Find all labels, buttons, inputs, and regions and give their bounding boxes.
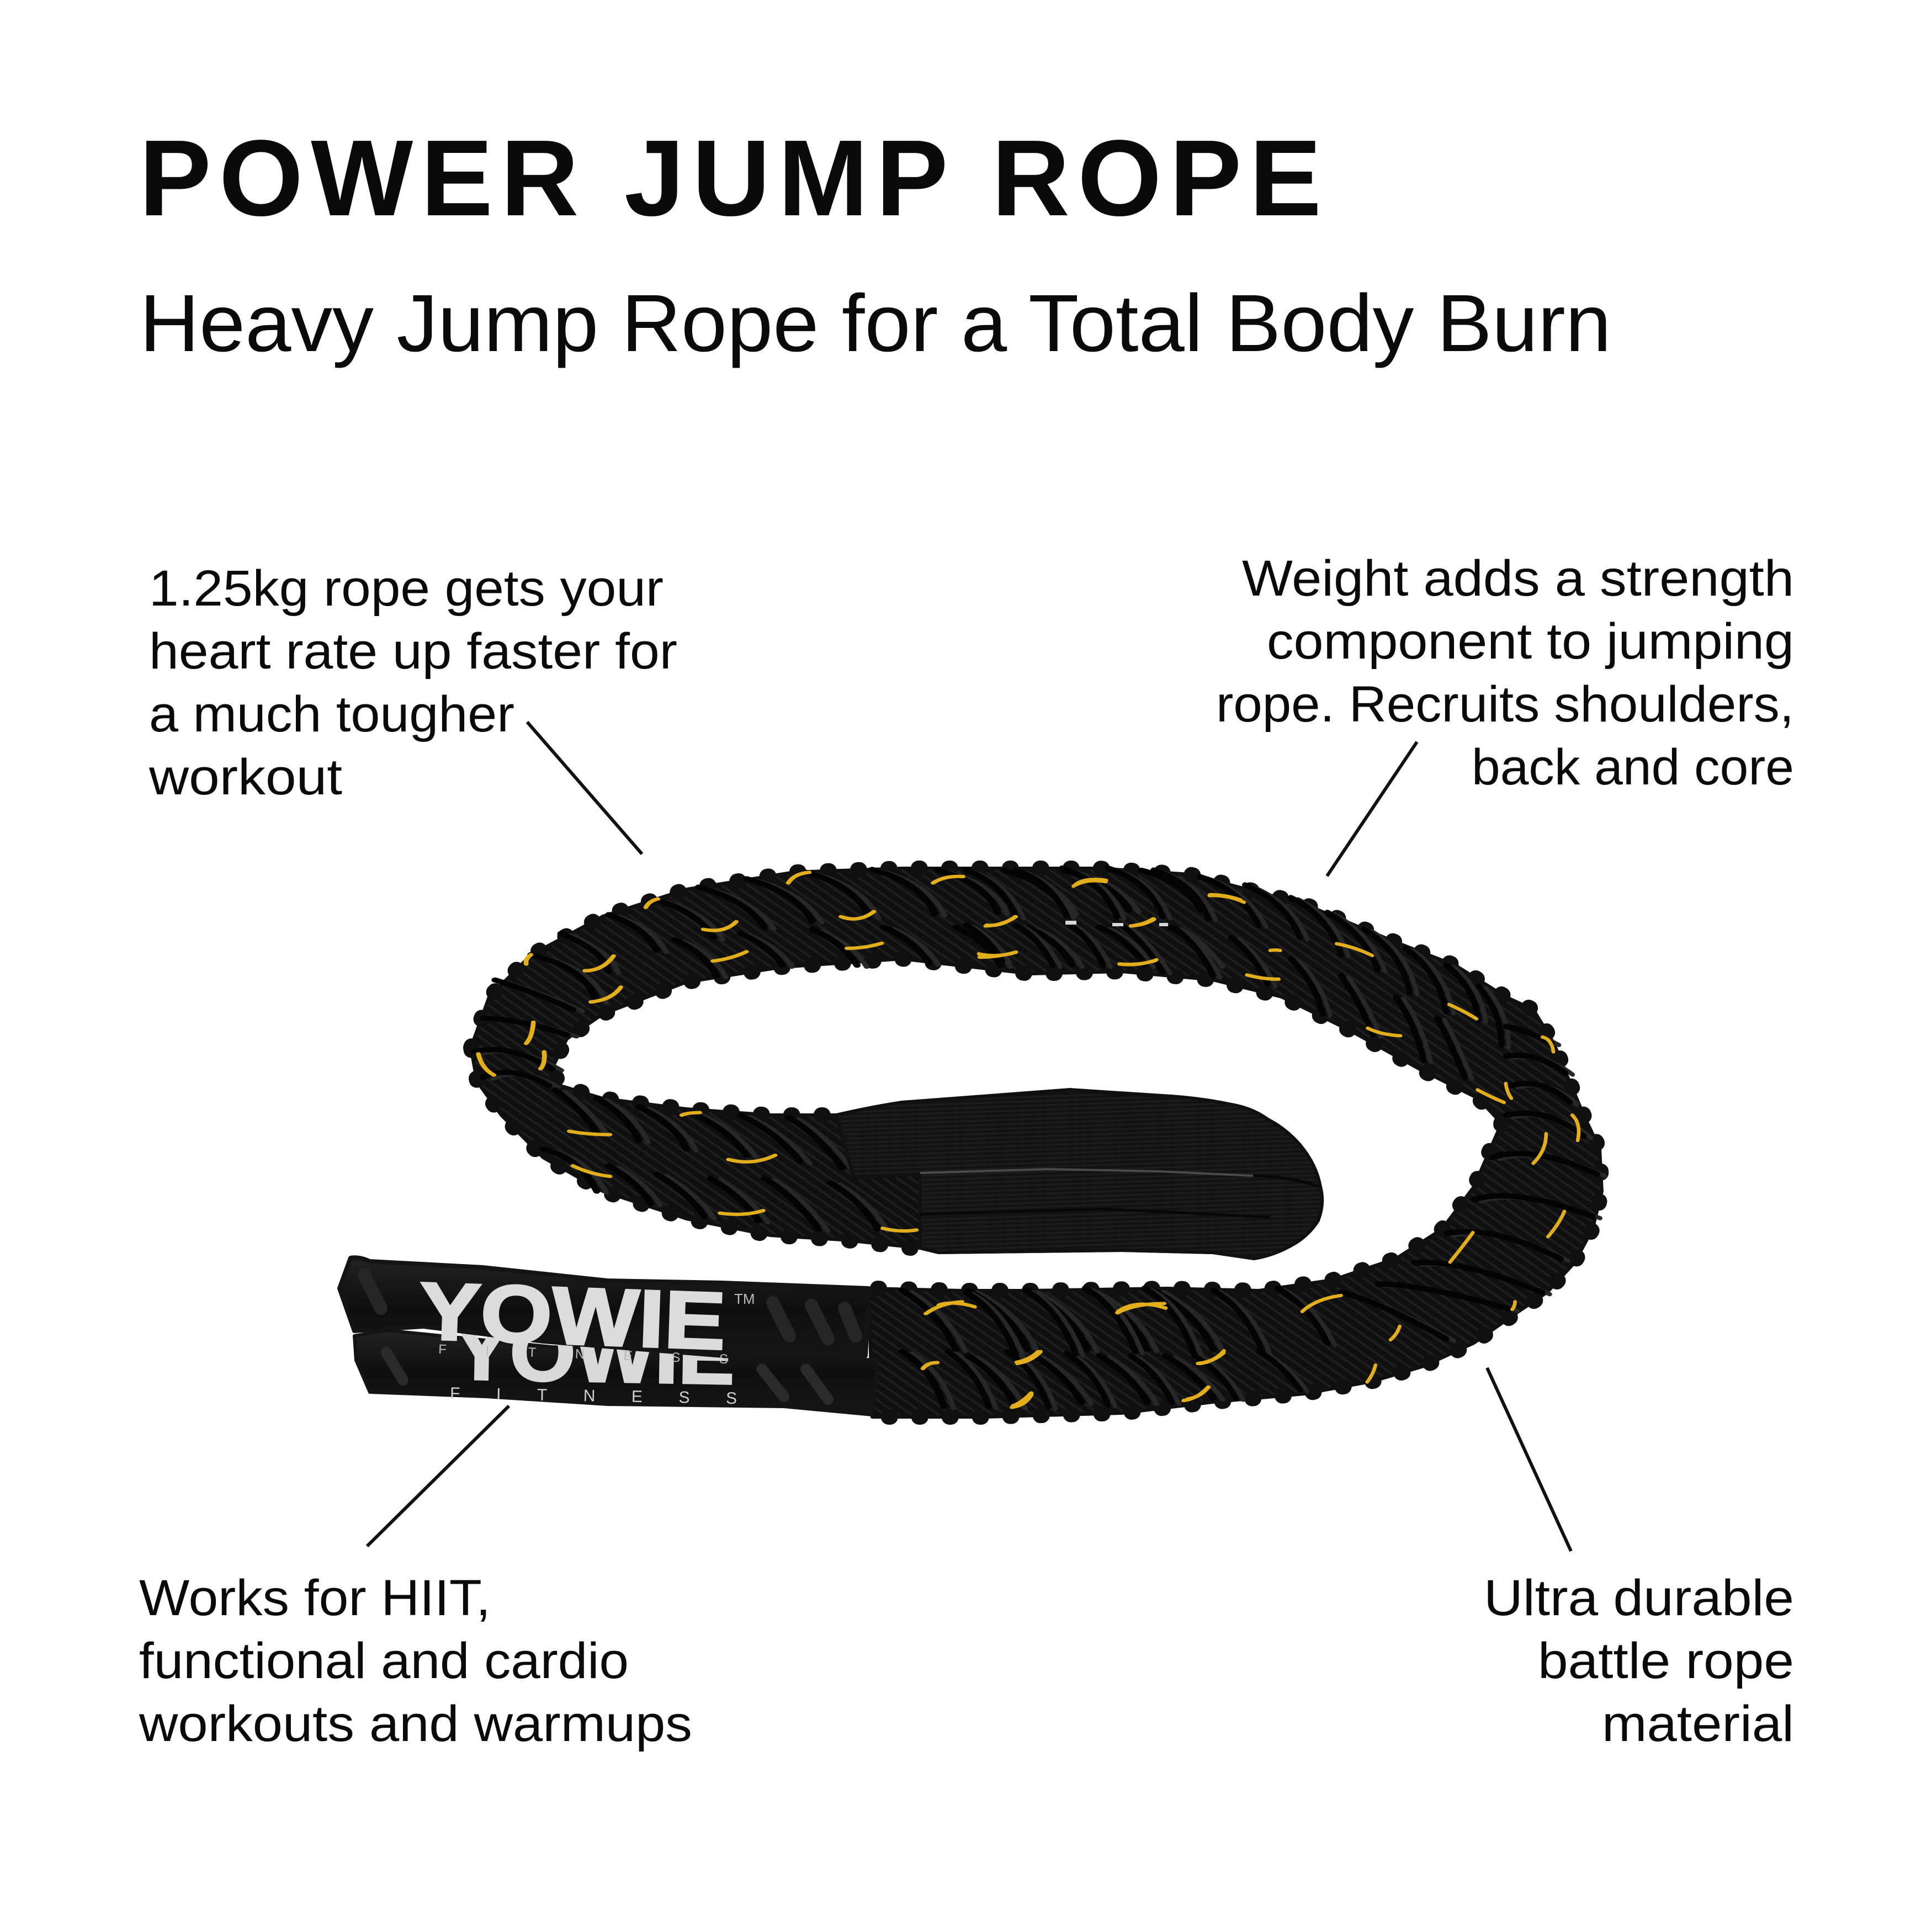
callout text: strength component [1216,550,1794,795]
rope light gaps [1065,921,1168,926]
callout text: durable material: Ultra durable [1484,1570,1794,1626]
rope sleeve [836,1090,1322,1259]
leader line: strength [1327,742,1417,876]
rope silhouette [471,868,1602,1417]
upper handle [339,1257,869,1367]
callout text: strength component: back and core [1472,739,1794,795]
trademark text: TM [734,1291,755,1307]
callout text: heart rate: a much tougher [149,686,514,742]
callout text: durable material: battle rope [1538,1633,1794,1689]
yellow flecks: right part [938,879,1579,1408]
callout text: workouts: functional and cardio [139,1633,629,1689]
lower fitness text: FITNESS [450,1384,737,1408]
callout text: durable material: material [1602,1696,1794,1752]
callout text: strength component: component to jumping [1267,613,1794,670]
callout text: heart rate: workout [148,749,342,805]
callout text: durable material [1484,1570,1794,1752]
leader line: heart rate [527,722,642,854]
yellow flecks: left part [479,872,1240,1406]
battle rope photo illustration [339,868,1605,1417]
rope strands: right part [948,868,1605,1408]
callout text: workouts: Works for HIIT, [139,1570,491,1626]
callout text: workouts [139,1570,692,1752]
callout text: strength component: Weight adds a strength [1242,550,1794,607]
upper fitness text: FITNESS [438,1342,728,1367]
callout text: heart rate: 1.25kg rope gets your [149,560,664,617]
callout text: strength component: rope. Recruits shoulders, [1216,676,1794,733]
callout text: workouts: workouts and warmups [139,1696,692,1752]
title: POWER JUMP ROPE [139,118,1321,238]
callout text: heart rate: heart rate up faster for [149,623,677,680]
rope strands: left part [474,869,1223,1408]
leader line: workouts [367,1406,509,1546]
lower logo text: YOWIE [453,1306,735,1402]
lower handle [354,1306,878,1415]
upper logo text: YOWIE [418,1266,727,1367]
leader line: durable [1487,1368,1571,1551]
subtitle: Heavy Jump Rope for a Total Body Burn [140,278,1611,369]
callout text: heart rate [148,560,677,805]
